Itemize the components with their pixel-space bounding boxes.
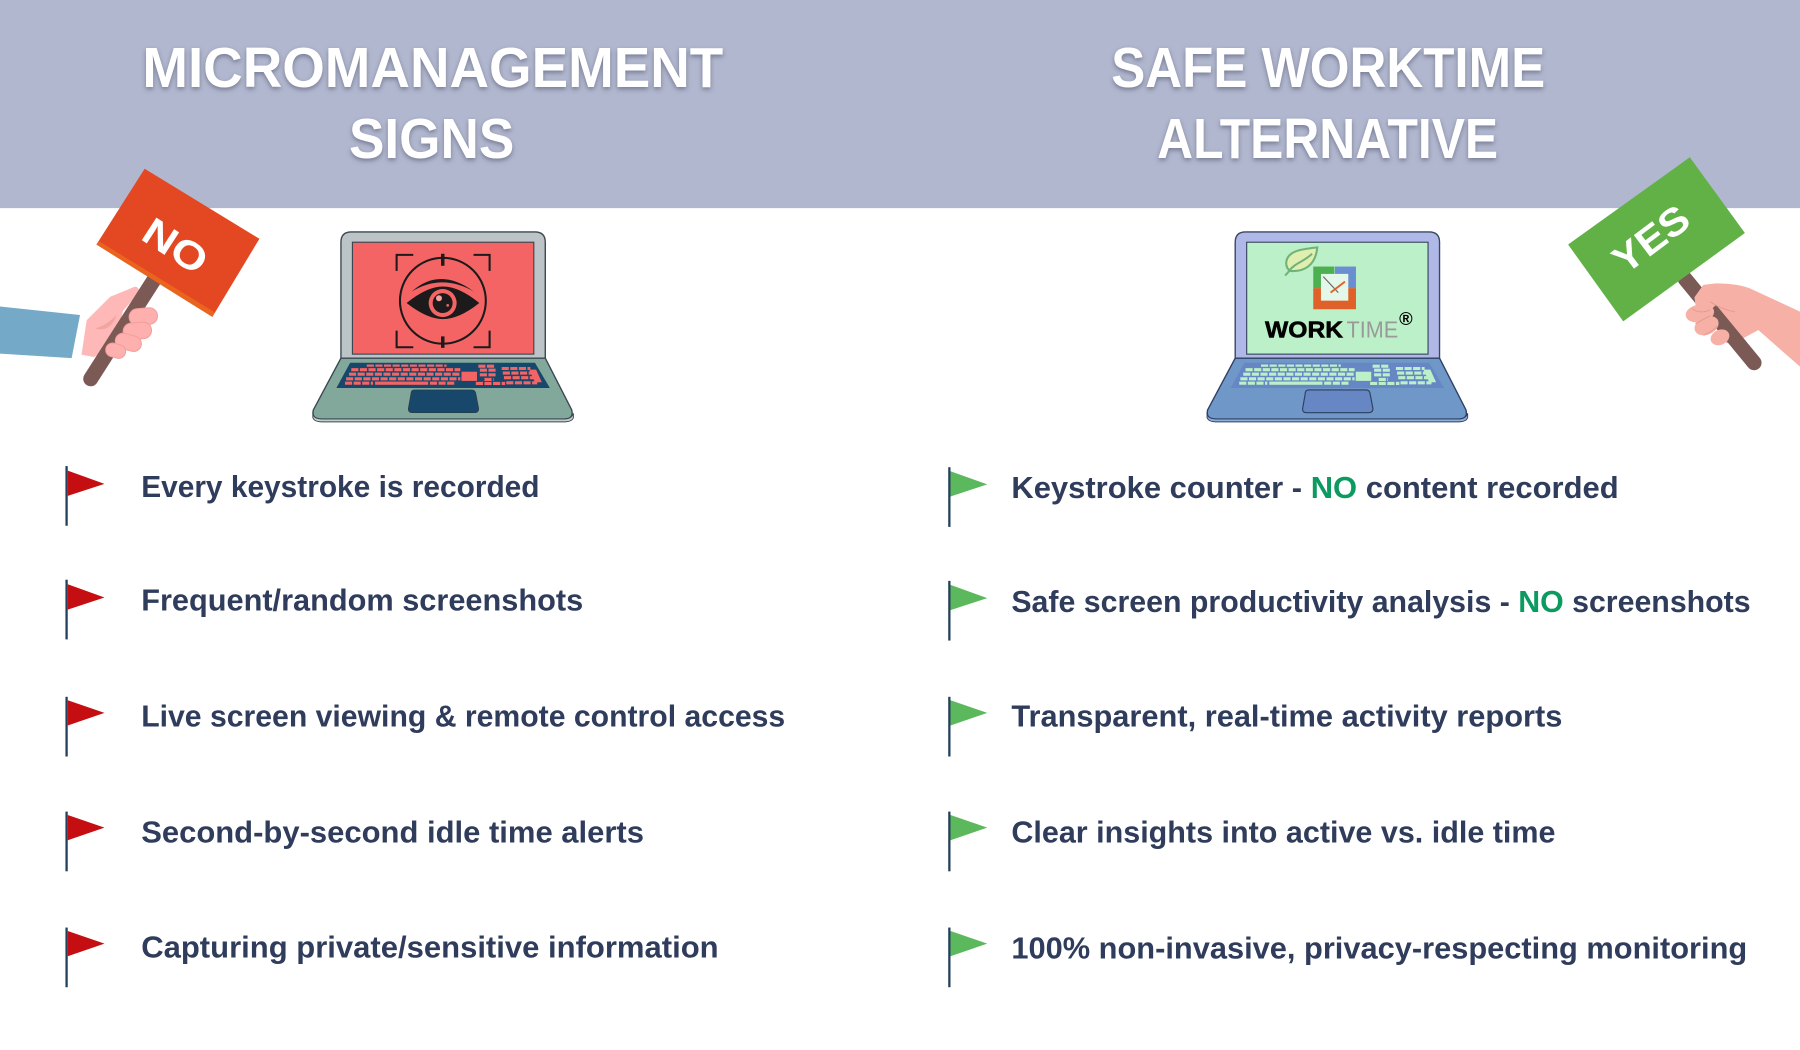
icon: surveillance eye target	[397, 254, 490, 348]
heading: safe worktime alternative: ALTERNATIVE	[1157, 107, 1498, 170]
item: idle alerts: Second-by-second idle time alerts	[141, 815, 644, 850]
item: keystrokes recorded: Every keystroke is recorded	[141, 469, 540, 504]
list: safe worktime alternative	[949, 467, 1751, 987]
item: keystrokes recorded	[67, 466, 540, 526]
logo: WorkTime: TIME	[1347, 316, 1398, 342]
item: activity reports: Transparent, real-time activity reports	[1011, 699, 1562, 734]
item: keystroke counter	[949, 467, 1619, 527]
illustration: hand holding YES sign: YES	[1605, 197, 1698, 283]
item: screen analysis: Safe screen productivity analysis - NO screenshots	[1011, 584, 1751, 619]
item: activity reports	[949, 697, 1562, 757]
illustration: hand holding NO sign	[0, 169, 259, 379]
logo: WorkTime: ®	[1399, 308, 1413, 329]
item: idle alerts	[67, 812, 644, 871]
heading: safe worktime alternative: SAFE WORKTIME	[1111, 36, 1545, 99]
illustration: laptop with surveillance eye	[313, 232, 573, 422]
item: screenshots: Frequent/random screenshots	[141, 583, 583, 618]
item: private information	[67, 928, 719, 987]
heading: micromanagement signs: MICROMANAGEMENT	[142, 36, 723, 99]
illustration: laptop with WorkTime logo	[1207, 232, 1468, 422]
illustration: hand holding YES sign	[1568, 157, 1800, 367]
heading: micromanagement signs: SIGNS	[349, 107, 514, 170]
item: active vs idle: Clear insights into active vs. idle time	[1011, 815, 1555, 850]
logo: WorkTime	[1265, 247, 1413, 342]
heading: safe worktime alternative	[1111, 36, 1545, 170]
item: live screen viewing	[67, 697, 785, 757]
header band	[0, 0, 1800, 208]
item: screenshots	[67, 580, 583, 639]
logo: WorkTime: WORK	[1265, 316, 1343, 342]
item: screen analysis	[949, 581, 1751, 641]
item: keystroke counter: Keystroke counter - NO content recorded	[1011, 470, 1619, 505]
illustration: hand holding NO sign: NO	[134, 210, 216, 284]
item: private information: Capturing private/sensitive information	[141, 929, 719, 964]
item: non-invasive monitoring: 100% non-invasive, privacy-respecting monitoring	[1011, 931, 1747, 966]
heading: micromanagement signs	[142, 36, 723, 170]
list: micromanagement signs	[67, 466, 785, 987]
item: active vs idle	[949, 812, 1555, 871]
item: live screen viewing: Live screen viewing & remote control access	[141, 699, 785, 734]
item: non-invasive monitoring	[949, 928, 1747, 987]
